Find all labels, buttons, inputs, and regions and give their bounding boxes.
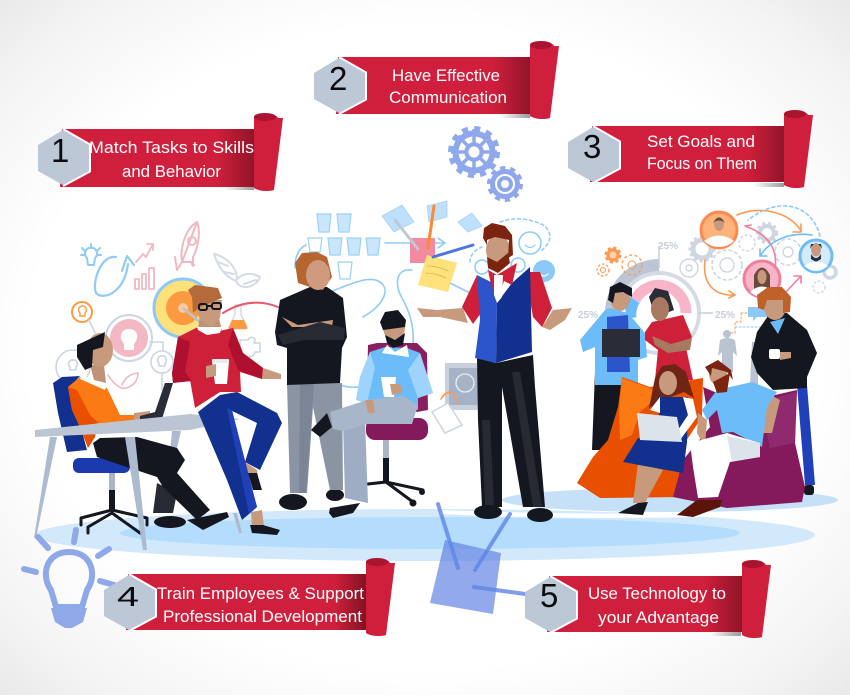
hand <box>134 411 150 420</box>
person: man in black turtleneck <box>275 252 347 510</box>
avatar: man, orange <box>701 212 737 248</box>
head <box>77 332 113 383</box>
beanbags <box>577 377 805 508</box>
banner 4: Train Employees and Support Professional Development <box>104 558 395 636</box>
shoes <box>618 502 648 515</box>
head <box>659 371 677 395</box>
donut chart <box>613 246 713 353</box>
laptop <box>140 383 173 420</box>
person: seated man in blue t-shirt <box>677 360 780 517</box>
banner 3: Set Goals and Focus on Them <box>568 110 813 188</box>
chair back <box>367 343 428 412</box>
crossed arms <box>278 317 345 345</box>
banner 4: Train Employees and Support Professional Development: Train Employees & Support <box>157 585 364 603</box>
sleeves <box>650 397 697 440</box>
rear desk leg <box>170 431 181 452</box>
banner 2: Have Effective Communication: 2 <box>329 60 347 97</box>
trousers <box>690 433 760 498</box>
tablet with smiley <box>445 363 478 410</box>
trousers <box>198 392 282 520</box>
shoes <box>279 489 344 510</box>
gears icon <box>451 129 520 200</box>
rear leg <box>153 483 177 513</box>
banner 1: Match Tasks to Skills and Behavior <box>38 113 283 191</box>
shoes <box>677 500 722 517</box>
hand on knee <box>365 400 375 413</box>
avatar: woman, pink <box>744 261 780 297</box>
right forearm <box>542 308 572 330</box>
cup and hand <box>206 359 229 384</box>
glasses <box>199 303 221 310</box>
pencils <box>395 206 473 257</box>
banner 2: Have Effective Communication: Have Effective <box>392 67 500 85</box>
shoes <box>154 512 229 530</box>
shirt <box>607 315 630 372</box>
vest <box>475 267 532 363</box>
t-shirt <box>702 382 777 447</box>
banner 2: Have Effective Communication <box>314 41 559 119</box>
silhouettes <box>718 330 758 385</box>
ground: floor ellipses <box>35 488 838 561</box>
left arm <box>697 413 707 447</box>
left forearm <box>417 308 468 323</box>
lower leg <box>343 420 368 503</box>
right idea doodles <box>578 206 836 385</box>
icon: flask <box>229 305 247 329</box>
person: woman in red dress <box>645 288 693 380</box>
banner 3: Set Goals and Focus on Them: Set Goals and <box>647 133 755 151</box>
shirt sleeves <box>462 272 552 327</box>
person: seated woman with laptop <box>618 364 697 515</box>
banner 1: Match Tasks to Skills and Behavior: and Behavior <box>122 163 221 181</box>
desk <box>34 414 242 550</box>
avatar: man, blue <box>800 240 832 272</box>
head <box>649 288 674 321</box>
person: man with laptop <box>580 282 647 450</box>
icon: blue bulb doodle <box>81 244 101 265</box>
icon: pink wings doodle <box>108 373 138 388</box>
banner 5: Use Technology to your Advantage: your Advantage <box>598 609 719 627</box>
icon: small orange bulb circle <box>72 302 92 322</box>
banner 1: Match Tasks to Skills and Behavior: 1 <box>51 132 69 169</box>
icon: growth chart doodle <box>135 244 154 289</box>
hand <box>262 368 281 379</box>
icon: puzzle doodle <box>240 337 260 363</box>
icon: wings doodle <box>214 254 260 287</box>
chair back <box>53 376 87 452</box>
grey gears <box>680 223 836 293</box>
chair seat <box>366 418 428 440</box>
laptop <box>637 413 682 442</box>
person: seated man in blue sweater <box>311 310 433 518</box>
banner 5: Use Technology to your Advantage: 5 <box>540 577 558 614</box>
tablet <box>602 329 640 357</box>
blue trousers <box>797 385 815 485</box>
icon: rocket doodle <box>175 222 199 270</box>
left idea doodles <box>56 222 278 390</box>
shoes <box>474 505 553 522</box>
percent labels: 25% <box>715 310 735 321</box>
cup <box>769 349 791 360</box>
yellow sticky note <box>418 255 457 292</box>
banner 5: Use Technology to your Advantage: Use Technology to <box>588 585 726 603</box>
envelopes <box>382 201 482 232</box>
chat bubble and dashed steps <box>728 307 770 333</box>
trousers <box>477 355 545 507</box>
trousers <box>287 383 343 493</box>
person: man in black hoodie <box>751 287 817 495</box>
person: presenter in blue vest <box>417 223 572 522</box>
skirt <box>623 438 687 473</box>
shoes <box>311 413 360 518</box>
trousers <box>93 437 210 520</box>
sweater <box>275 287 347 385</box>
cup and hand <box>381 377 403 397</box>
wavy connector lines <box>295 238 470 387</box>
tie <box>494 275 503 303</box>
banner 3: Set Goals and Focus on Them: 3 <box>583 128 601 165</box>
icon: translucent light bulb <box>24 530 114 628</box>
chair base <box>81 473 147 533</box>
sweater <box>68 377 140 448</box>
head <box>188 285 222 335</box>
icon: translucent note and pencils <box>430 504 525 614</box>
hoodie <box>751 313 817 390</box>
head <box>608 282 632 311</box>
collar <box>382 345 409 357</box>
orange beanbag <box>577 377 703 498</box>
head <box>705 360 733 393</box>
banner 2: Have Effective Communication: Communication <box>389 89 507 107</box>
head <box>380 310 406 348</box>
icon: target <box>154 279 212 337</box>
percent labels: 25% <box>658 241 678 252</box>
top <box>658 397 688 443</box>
banner 5: Use Technology to your Advantage <box>525 560 771 638</box>
icon: grey bulb circles <box>56 320 173 390</box>
person: man at desk in orange sweater <box>53 332 229 533</box>
icon: pink bulb circle <box>106 315 152 361</box>
right arm <box>763 393 780 433</box>
person: woman in red sweater <box>172 285 282 535</box>
banner 3: Set Goals and Focus on Them: Focus on Them <box>647 155 757 173</box>
network arrows <box>705 206 820 298</box>
chair base <box>368 440 425 506</box>
icon: loop arrow doodle <box>95 256 134 296</box>
percent labels: 25% <box>578 310 598 321</box>
shoe and foot, raised <box>245 462 262 490</box>
percent labels <box>578 241 735 321</box>
thigh <box>330 396 418 431</box>
banner 4: Train Employees and Support Professional Development: 4 <box>117 581 139 612</box>
chair seat <box>73 458 130 473</box>
head <box>295 252 332 290</box>
notepad doodle <box>432 392 462 433</box>
shoe and foot, lower <box>250 510 280 535</box>
jacket <box>580 308 647 385</box>
cups doodle <box>308 214 380 279</box>
sweater <box>172 327 263 408</box>
banner 4: Train Employees and Support Professional Development: Professional Development <box>163 608 362 626</box>
centre idea doodles <box>295 201 555 433</box>
hair <box>649 364 694 408</box>
shirt <box>770 318 785 334</box>
head <box>483 223 513 273</box>
smiley doodles <box>470 219 555 282</box>
legs <box>633 463 663 503</box>
orange gears <box>597 248 642 276</box>
head <box>757 287 791 320</box>
pink sticky note <box>410 238 435 263</box>
purple beanbag <box>673 387 805 508</box>
banner 1: Match Tasks to Skills and Behavior: Match Tasks to Skills <box>89 139 254 157</box>
shirt collar <box>488 263 517 303</box>
sweater <box>356 347 433 410</box>
collar <box>80 375 107 390</box>
